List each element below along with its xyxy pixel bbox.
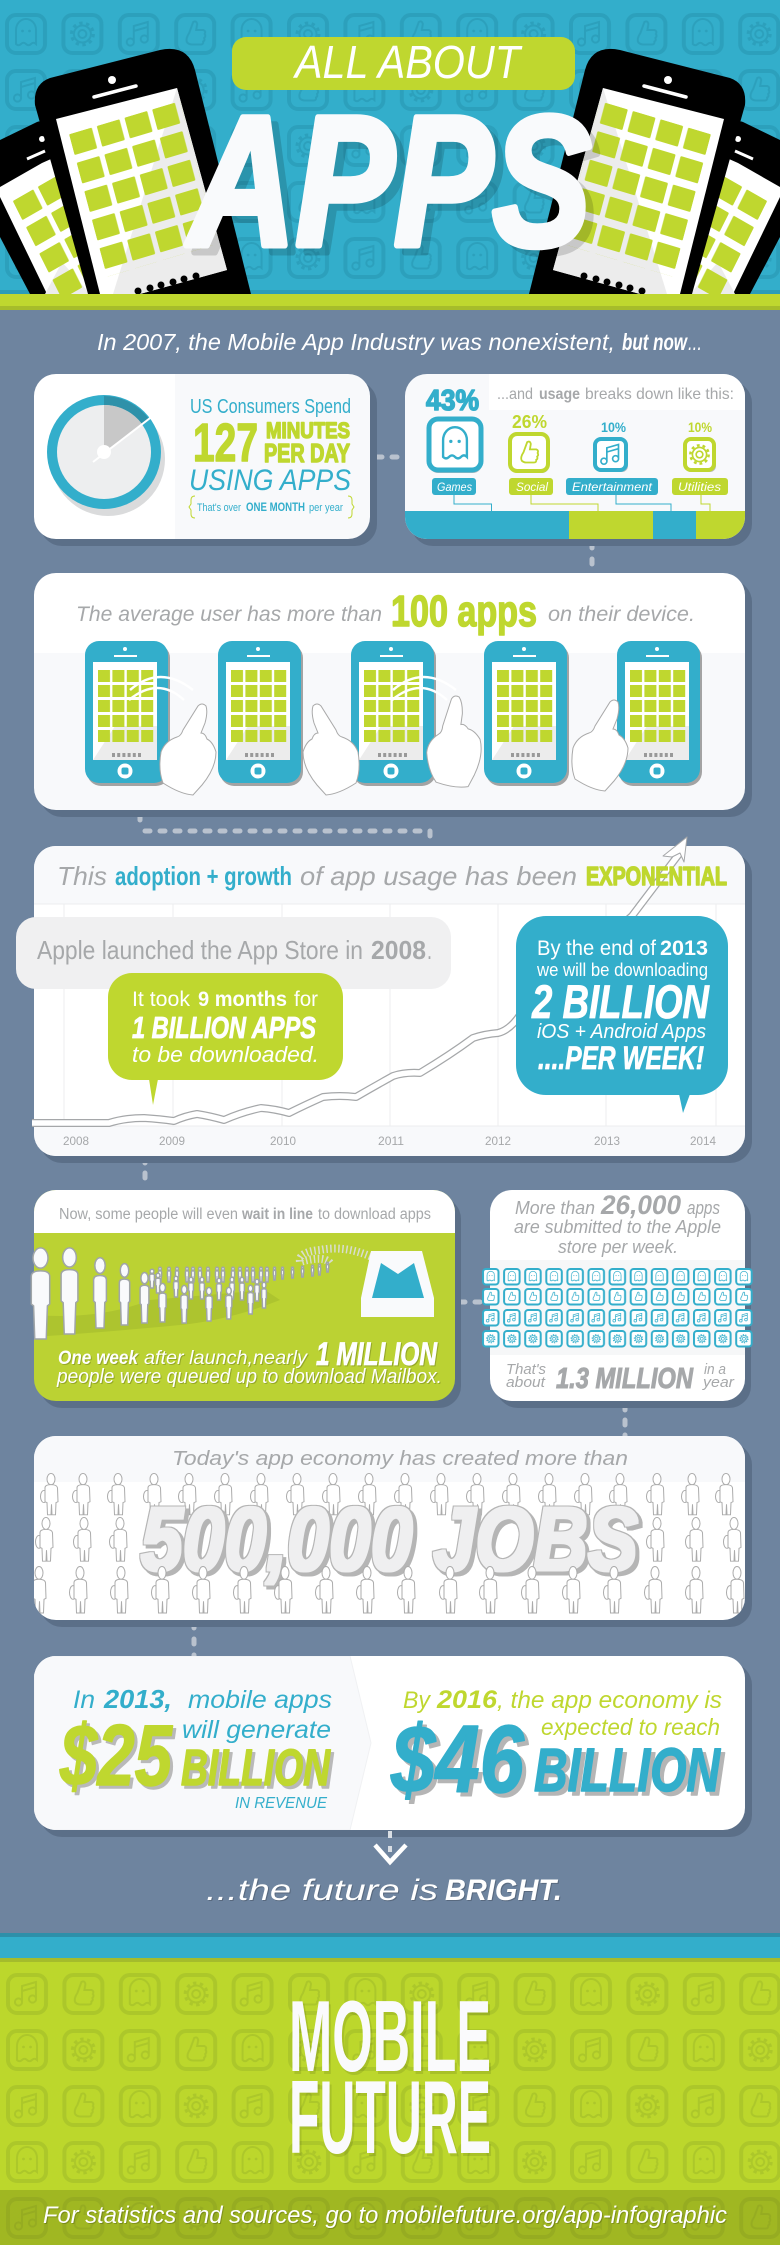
icon: mailbox [361,1251,434,1317]
panel: apps submitted [482,1190,756,1408]
text: 2016 revenue: BILLION [534,1736,721,1804]
panel: usage breakdown [405,374,752,546]
icon: entertainment [595,439,628,472]
footer: FUTURE [289,2060,491,2176]
heading: growth: adoption + growth [115,861,292,891]
text: 2013 revenue: mobile apps [188,1686,332,1714]
text: 2013 revenue: 2013, [103,1684,172,1714]
header [0,0,780,332]
icon: right phones [529,48,780,294]
text: submissions [514,1190,721,1257]
percentage: utilities: 10% [688,419,712,435]
people rows back [36,1473,741,1561]
callout: 1 billion apps: 9 months [198,988,287,1011]
callout: 1 billion apps: 1 BILLION APPS [132,1010,316,1045]
text: 2013 revenue: will generate [182,1716,331,1744]
callout: 1 billion apps [108,973,343,1105]
heading: growth: EXPONENTIAL [586,861,727,891]
panel: time spent [34,374,377,546]
panel: mailbox queue [31,1190,461,1408]
panel: revenue [34,1656,752,1837]
percentage: entertainment: 10% [601,419,626,435]
text: per year: year [702,1374,735,1391]
intro line: ... [688,329,702,355]
connector dashes [140,457,625,1656]
swipe arcs [129,677,456,700]
icon: left phones [0,48,251,294]
panel: exponential growth [16,837,752,1163]
footer [0,1933,780,2245]
heading: 100 apps: 100 apps [391,587,537,636]
icon: clock dial [47,395,165,516]
text: per year: That's [506,1361,546,1378]
icon: social [510,434,549,473]
logo: Mobile Future: MOBILE [289,1981,491,2093]
heading: growth: This [57,861,107,891]
text: minutes per day [189,396,354,518]
text: 2016 revenue: expected to reach [541,1714,720,1740]
text: per year [506,1361,735,1395]
header band [0,294,780,310]
text: per year: about [506,1374,546,1391]
text: 2013 revenue: In [73,1686,95,1714]
heading: growth: of app usage has been [300,861,577,891]
text: minutes per day: per year [309,502,343,514]
text: 2013 revenue: $25 [59,1708,173,1804]
callout: app store launch [16,917,451,989]
heading: usage [497,386,734,403]
big number: 500,000 jobs: 500,000 JOBS [141,1490,638,1590]
text: one million: after launch,nearly [144,1348,309,1369]
closing line [206,1874,562,1907]
source line: For statistics and sources, go to mobilefuture.org/app-infographic [43,2202,727,2229]
callout: 2 billion per week: By the end of [537,937,656,960]
icon: utilities [685,439,716,472]
text: one million: One week [58,1348,139,1369]
callout: 2 billion per week: ....PER WEEK! [538,1040,704,1076]
phones row [85,641,702,786]
text: minutes per day: US Consumers Spend [190,396,351,418]
callout: 2 billion per week [516,916,728,1113]
text: submissions: store per week. [558,1237,678,1257]
callout: app store launch: 2008 [371,935,426,965]
heading: 100 apps [76,587,695,636]
percentage: social: 26% [512,412,547,432]
line chart [32,837,687,1123]
text: minutes per day: PER DAY [264,438,350,468]
heading: wait in line: to download apps [318,1206,431,1223]
callout: 2 billion per week: iOS + Android Apps [537,1021,706,1043]
text: minutes per day: MINUTES [266,418,350,443]
x axis years: 2013 [594,1134,620,1148]
icon: games [429,419,482,473]
heading: 100 apps: The average user has more than [76,603,382,626]
panel: jobs [28,1436,752,1627]
heading: wait in line [59,1206,431,1223]
text: submissions: apps [687,1198,720,1218]
text: minutes per day: USING APPS [189,464,351,497]
text: minutes per day: That's over [197,502,241,514]
text: submissions: More than [515,1198,595,1218]
callout: 2 billion per week: 2 BILLION [531,975,710,1028]
callout: 1 billion apps: for [294,988,318,1011]
x axis years: 2014 [690,1134,716,1148]
x axis years: 2009 [159,1134,185,1148]
x axis years: 2008 [63,1134,89,1148]
intro line: In 2007, the Mobile App Industry was nonexistent, [97,329,615,355]
text: 2016 revenue: $46 [390,1706,525,1813]
title: APPS: APPS [186,79,591,285]
heading: usage: ...and [497,386,533,403]
callout: app store launch: Apple launched the App Store in [37,935,363,965]
panel: 100 apps [34,573,752,817]
heading: wait in line: wait in line [241,1206,313,1223]
text: one million [56,1336,442,1388]
callout: 2 billion per week: 2013 [660,937,708,960]
text: submissions: are submitted to the Apple [514,1217,721,1237]
text: minutes per day: 127 [193,413,258,473]
heading: usage: breaks down like this: [585,386,734,403]
text: 2016 revenue: 2016 [436,1686,498,1714]
text: one million: 1 MILLION [316,1336,438,1372]
callout: 2 billion per week: we will be downloading [536,960,708,980]
heading: 100 apps: on their device. [548,603,695,626]
text: 2013 revenue: BILLION [181,1739,331,1796]
closing line: ...the future is [206,1874,438,1907]
text: 2013 revenue: IN REVENUE [235,1795,327,1812]
heading: usage: usage [539,386,580,403]
heading: growth [57,861,727,891]
stacked usage bar [405,511,745,539]
people queue [31,1248,372,1339]
text: per year: 1.3 MILLION [556,1363,694,1395]
percentage: games: 43% [426,385,479,417]
heading: jobs: Today's app economy has created more than [172,1448,628,1470]
closing line: BRIGHT. [445,1874,562,1907]
x axis years: 2010 [270,1134,296,1148]
x axis years: 2012 [485,1134,511,1148]
text: minutes per day: ONE MONTH [246,500,305,514]
people row front [28,1566,744,1613]
text: 2016 revenue: By [403,1687,432,1714]
icon grid [482,1268,756,1349]
category labels [432,478,728,495]
icon: hands [160,693,628,795]
heading: wait in line: Now, some people will even [59,1206,238,1223]
text: one million: people were queued up to download Mailbox. [56,1366,442,1388]
arrow [375,1831,406,1862]
intro line: but now [622,329,689,355]
title pill: ALL ABOUT [292,36,523,88]
logo: Mobile Future [289,1981,491,2176]
text: 2013 revenue [59,1684,332,1812]
text: 2016 revenue [390,1686,722,1813]
text: 2016 revenue: , the app economy is [497,1687,722,1714]
text: submissions: 26,000 [600,1190,681,1220]
category labels: Social [516,480,548,494]
callout: 1 billion apps: It took [132,988,191,1011]
category labels: Utilities [678,480,721,494]
text: per year: in a [704,1361,726,1378]
category labels: Entertainment [572,480,653,494]
callout: app store launch: . [427,935,432,965]
callout: 1 billion apps: to be downloaded. [132,1042,319,1067]
x axis years: 2011 [378,1134,404,1148]
category labels: Games [437,480,472,494]
x axis years [63,1134,716,1148]
